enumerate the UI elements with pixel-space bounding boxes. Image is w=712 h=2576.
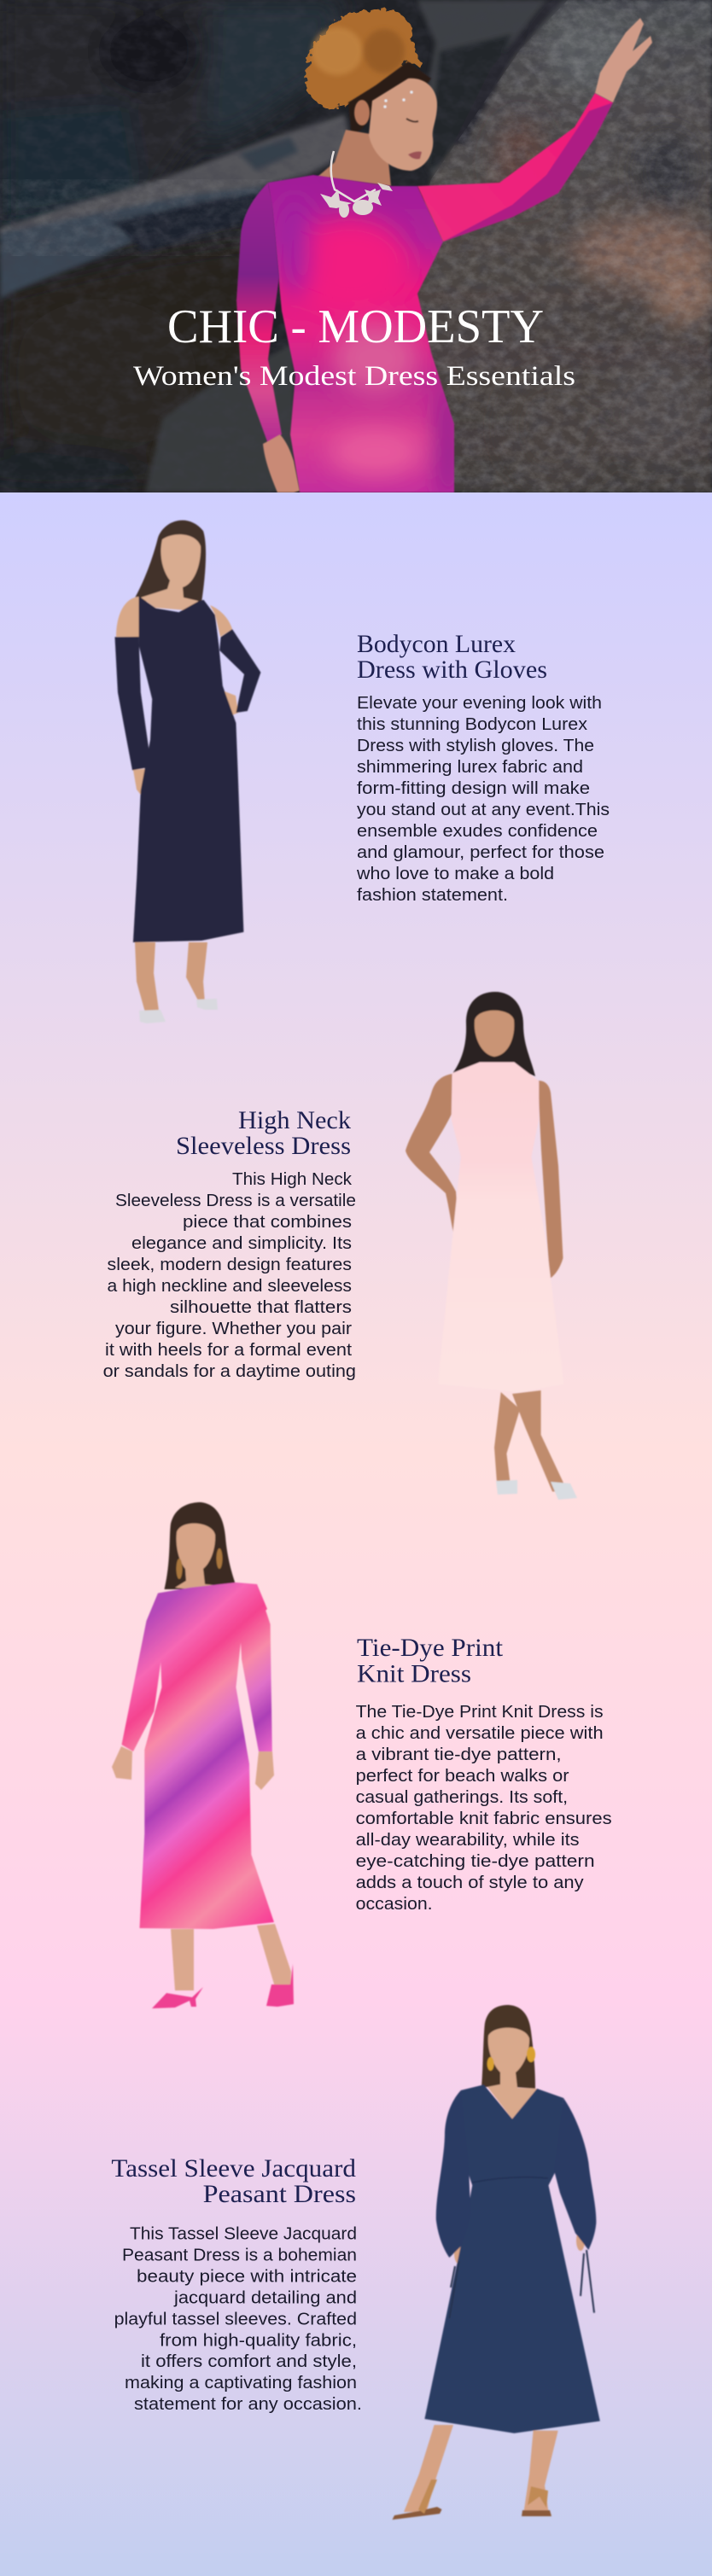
description: Bodycon Lurex Dress: form-fitting design will make [357,778,590,798]
description: Tassel Sleeve Jacquard Peasant Dress: beauty piece with intricate [137,2267,357,2286]
description: Tie-Dye Print Knit Dress: all-day wearability, while its [356,1830,580,1850]
description: Tassel Sleeve Jacquard Peasant Dress [114,2224,362,2414]
hair bun [305,9,431,137]
heading: Bodycon Lurex Dress with Gloves: Bodycon Lurex [357,630,516,658]
right hand on rock [595,18,652,102]
description: High Neck Sleeveless Dress: Sleeveless Dress is a versatile [115,1191,356,1210]
face and neck [141,534,201,611]
product 2: model in high neck sleeveless dress [406,992,577,1500]
earrings [176,1548,222,1579]
description: Bodycon Lurex Dress: ensemble exudes confidence [357,821,598,841]
legs [404,2425,558,2512]
description: High Neck Sleeveless Dress: elegance and simplicity. Its [131,1233,352,1253]
description: Tassel Sleeve Jacquard Peasant Dress: playful tassel sleeves. Crafted [114,2309,357,2328]
description: High Neck Sleeveless Dress: silhouette that flatters [170,1297,352,1317]
description: Bodycon Lurex Dress: fashion statement. [357,885,508,905]
description: Bodycon Lurex Dress: Dress with stylish gloves. The [357,736,594,755]
dress torso [268,175,460,504]
description: Tie-Dye Print Knit Dress: a chic and versatile piece with [356,1723,604,1743]
hair [481,2005,535,2089]
heading: High Neck Sleeveless Dress: High Neck [238,1106,351,1134]
heading: Tie-Dye Print Knit Dress: Tie-Dye Print [357,1634,504,1662]
description: Bodycon Lurex Dress: this stunning Bodycon Lurex [357,714,588,734]
description: Bodycon Lurex Dress: shimmering lurex fabric and [357,757,583,777]
product 3: model in tie-dye print knit dress [112,1502,294,2008]
hero subtitle: Women's Modest Dress Essentials [133,361,575,392]
description: High Neck Sleeveless Dress: it with heels for a formal event [105,1340,352,1360]
heading: Tassel Sleeve Jacquard Peasant Dress [111,2154,356,2208]
description: Tie-Dye Print Knit Dress: casual gatherings. Its soft, [356,1787,568,1807]
description: Tassel Sleeve Jacquard Peasant Dress: This Tassel Sleeve Jacquard [130,2224,357,2244]
description: Bodycon Lurex Dress: and glamour, perfect for those [357,842,604,862]
navy dress [424,2084,600,2433]
left glove [114,637,151,770]
description: Bodycon Lurex Dress [356,693,610,905]
legs [494,1390,568,1492]
right glove [219,629,260,713]
description: High Neck Sleeveless Dress: your figure. Whether you pair [115,1319,352,1338]
dress right sleeve [417,93,613,242]
left hand [263,434,300,492]
heading: Tassel Sleeve Jacquard Peasant Dress: Peasant Dress [203,2180,356,2208]
description: High Neck Sleeveless Dress: piece that combines [183,1212,352,1232]
hands [454,2230,585,2264]
description: Bodycon Lurex Dress: Elevate your evening look with [357,693,602,713]
description: Tie-Dye Print Knit Dress: The Tie-Dye Print Knit Dress is [356,1702,604,1722]
hero banner [0,0,712,504]
description: Bodycon Lurex Dress: who love to make a bold [356,864,554,883]
face [354,79,437,171]
product 4: model in tassel sleeve jacquard peasant dress [393,2005,600,2520]
sandals [393,2480,552,2520]
description: Tie-Dye Print Knit Dress [356,1702,612,1914]
description: Tie-Dye Print Knit Dress: adds a touch of style to any [356,1873,584,1892]
dress left sleeve [236,183,282,444]
heading: Bodycon Lurex Dress with Gloves: Dress with Gloves [357,656,547,684]
hair [452,992,535,1076]
hero photo: rocks [0,0,712,495]
face [475,1011,514,1057]
legs [135,942,207,1012]
hands [112,1746,274,1790]
description: Tassel Sleeve Jacquard Peasant Dress: making a captivating fashion [125,2373,357,2392]
heading: Tassel Sleeve Jacquard Peasant Dress: Tassel Sleeve Jacquard [111,2154,356,2183]
hair [164,1502,236,1589]
description: High Neck Sleeveless Dress: This High Neck [232,1169,353,1189]
navy lurex dress [133,597,243,942]
heading: High Neck Sleeveless Dress: Sleeveless Dress [176,1132,351,1160]
description: Tassel Sleeve Jacquard Peasant Dress: jacquard detailing and [173,2288,357,2308]
hero model: woman in magenta dress [236,9,652,504]
description: Tie-Dye Print Knit Dress: eye-catching tie-dye pattern [356,1851,595,1871]
arms [406,1074,563,1279]
neck [318,130,391,186]
description: Tie-Dye Print Knit Dress: perfect for beach walks or [356,1766,569,1786]
description: Tie-Dye Print Knit Dress: comfortable knit fabric ensures [356,1809,612,1828]
waist tie [472,2177,548,2183]
shoulders and arms skin [116,597,238,809]
face and neck [487,2028,537,2118]
description: High Neck Sleeveless Dress: a high neckline and sleeveless [108,1276,352,1296]
heading: Bodycon Lurex Dress with Gloves [357,630,547,684]
description: Tie-Dye Print Knit Dress: a vibrant tie-dye pattern, [356,1745,562,1764]
gold earrings [487,2047,535,2071]
tassels [449,2250,594,2318]
description: Bodycon Lurex Dress: you stand out at any event.This [357,800,610,819]
heading: High Neck Sleeveless Dress [176,1106,351,1160]
right sleeve [554,2098,596,2250]
hero title: CHIC - MODESTY [167,300,544,353]
tie-dye dress and sleeves [121,1582,274,1929]
necklace [320,151,393,218]
legs [171,1924,291,1990]
shoes [139,999,218,1023]
heading: Tie-Dye Print Knit Dress: Knit Dress [357,1660,471,1688]
description: High Neck Sleeveless Dress: sleek, modern design features [108,1255,352,1274]
left sleeve [436,2090,470,2258]
description: High Neck Sleeveless Dress: or sandals for a daytime outing [103,1361,356,1381]
description: Tassel Sleeve Jacquard Peasant Dress: it offers comfort and style, [141,2352,357,2371]
product 1: model in bodycon lurex dress with gloves [114,521,260,1023]
pink heels [152,1964,294,2008]
hair back [133,521,206,603]
description: Tie-Dye Print Knit Dress: occasion. [356,1894,433,1914]
face and neck [175,1524,222,1589]
blush dress [438,1062,563,1392]
description: Tassel Sleeve Jacquard Peasant Dress: statement for any occasion. [134,2394,362,2414]
description: High Neck Sleeveless Dress [103,1169,356,1381]
silver shoes [496,1480,577,1500]
heading: Tie-Dye Print Knit Dress [357,1634,504,1688]
description: Tassel Sleeve Jacquard Peasant Dress: Peasant Dress is a bohemian [122,2246,357,2265]
description: Tassel Sleeve Jacquard Peasant Dress: from high-quality fabric, [160,2330,357,2350]
